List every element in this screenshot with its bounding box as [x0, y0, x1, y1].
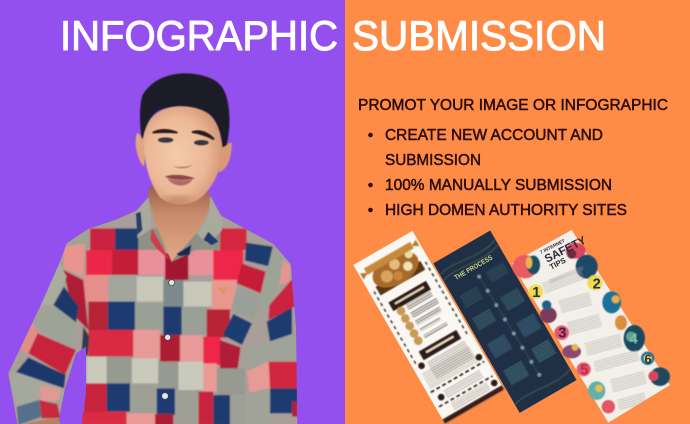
- hair: [140, 73, 229, 147]
- shirt buttons: [162, 280, 175, 399]
- panel: orange background: [345, 0, 690, 424]
- tip numbers: 1: [532, 285, 540, 301]
- directions banner: [419, 330, 461, 360]
- card heading: 7 INTERNET: [539, 238, 566, 255]
- person photo: [0, 73, 300, 424]
- card heading: SAFETY: [543, 234, 589, 266]
- panel: purple background: [0, 0, 345, 424]
- tip numbers: [532, 276, 652, 379]
- chin shadow: [163, 198, 193, 204]
- tip text blocks: [542, 266, 647, 410]
- tip numbers: 4: [630, 331, 639, 347]
- collar: [136, 196, 222, 262]
- title word: infographic: INFOGRAPHIC: [60, 12, 338, 59]
- subheading: PROMOT YOUR IMAGE OR INFOGRAPHIC: [358, 97, 668, 114]
- shirt: [0, 193, 300, 424]
- sample infographics: [353, 229, 670, 424]
- card: internet safety tips: [512, 229, 670, 423]
- card heading: TIPS: [548, 256, 567, 272]
- food illustration: [359, 239, 431, 299]
- bullet: manual submission: 100% MANUALLY SUBMISSION: [385, 177, 612, 194]
- left sleeve: [67, 232, 86, 276]
- face: [143, 105, 223, 204]
- neck: [148, 187, 211, 262]
- title word: submission: SUBMISSION: [352, 12, 606, 59]
- bullet: new account: [368, 127, 603, 169]
- pocket logo: [217, 287, 228, 295]
- title: [60, 12, 606, 59]
- card heading: [539, 229, 592, 272]
- bullet: new account: CREATE NEW ACCOUNT AND: [385, 127, 603, 144]
- card heading: THE PROCESS: [454, 254, 494, 282]
- illustrated blobs: [512, 243, 670, 413]
- ingredients banner: [388, 281, 431, 311]
- tip numbers: 5: [580, 363, 588, 379]
- hand at left cuff: [24, 417, 61, 424]
- tip numbers: 2: [593, 276, 601, 292]
- bullet: new account: SUBMISSION: [385, 152, 481, 169]
- bullet: authority sites: HIGH DOMEN AUTHORITY SITES: [385, 202, 627, 219]
- card: the process: [433, 230, 577, 413]
- tip numbers: 6: [644, 352, 652, 366]
- ingredient biscuits: [395, 305, 424, 347]
- right sleeve: [260, 246, 286, 308]
- bullet list: [368, 127, 627, 219]
- card: food recipe: [353, 231, 504, 424]
- eyebrows, eyes, nose and mouth: [153, 130, 214, 185]
- tip numbers: 3: [558, 325, 566, 341]
- ears: [136, 133, 232, 173]
